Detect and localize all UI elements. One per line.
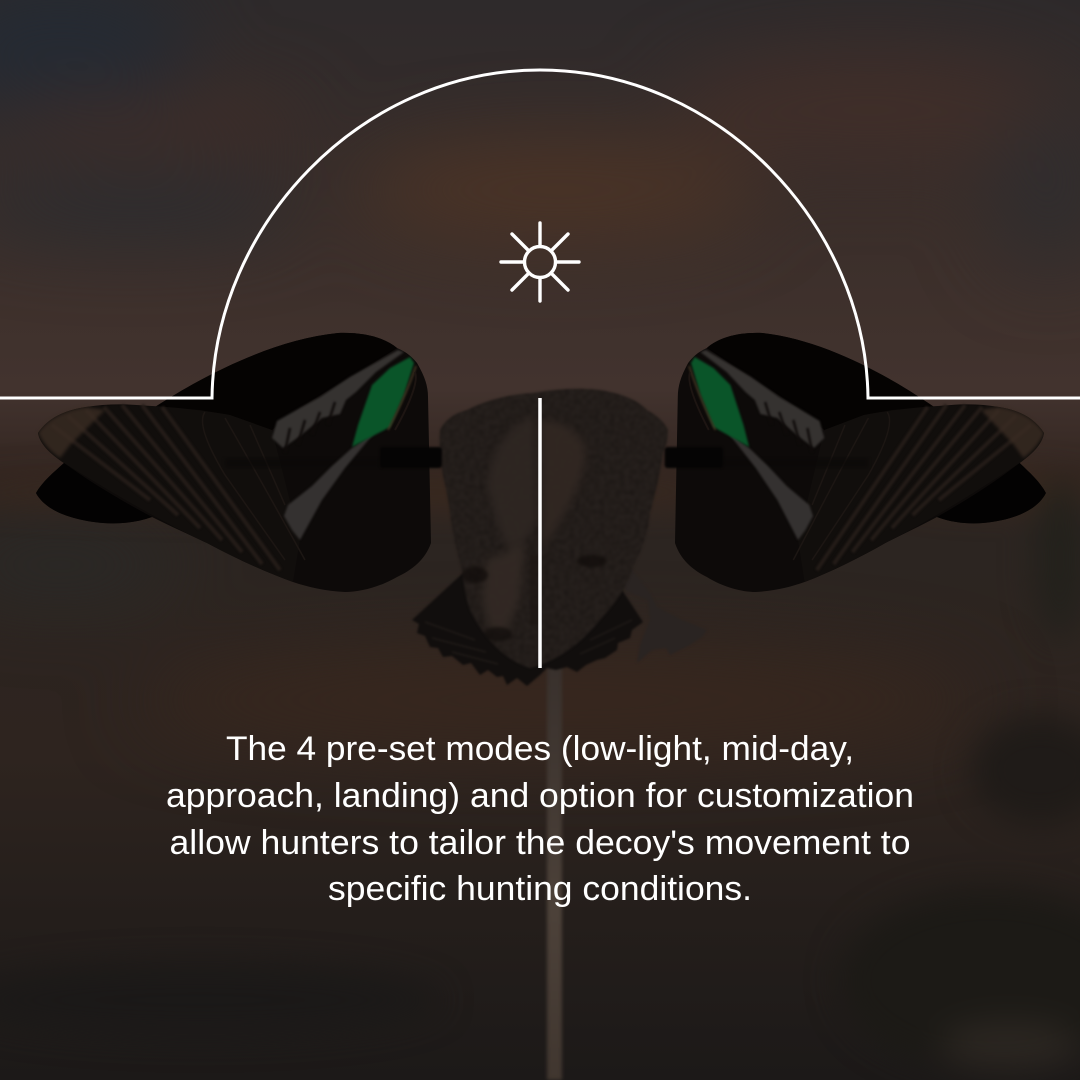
decoy body — [439, 388, 668, 668]
body text: specific hunting conditions. — [328, 870, 752, 908]
body text: approach, landing) and option for customization — [166, 777, 914, 815]
decoy pole — [547, 660, 562, 1080]
right wing — [665, 333, 1046, 592]
decoy tail — [412, 573, 643, 686]
icon: sun — [501, 223, 579, 301]
body text — [166, 730, 914, 908]
body text: allow hunters to tailor the decoy's movement to — [170, 824, 910, 862]
center line — [538, 398, 542, 668]
left wing — [36, 333, 442, 592]
decoy foot — [622, 565, 707, 663]
body text: The 4 pre-set modes (low-light, mid-day, — [226, 730, 854, 768]
dome outline — [0, 70, 1080, 398]
